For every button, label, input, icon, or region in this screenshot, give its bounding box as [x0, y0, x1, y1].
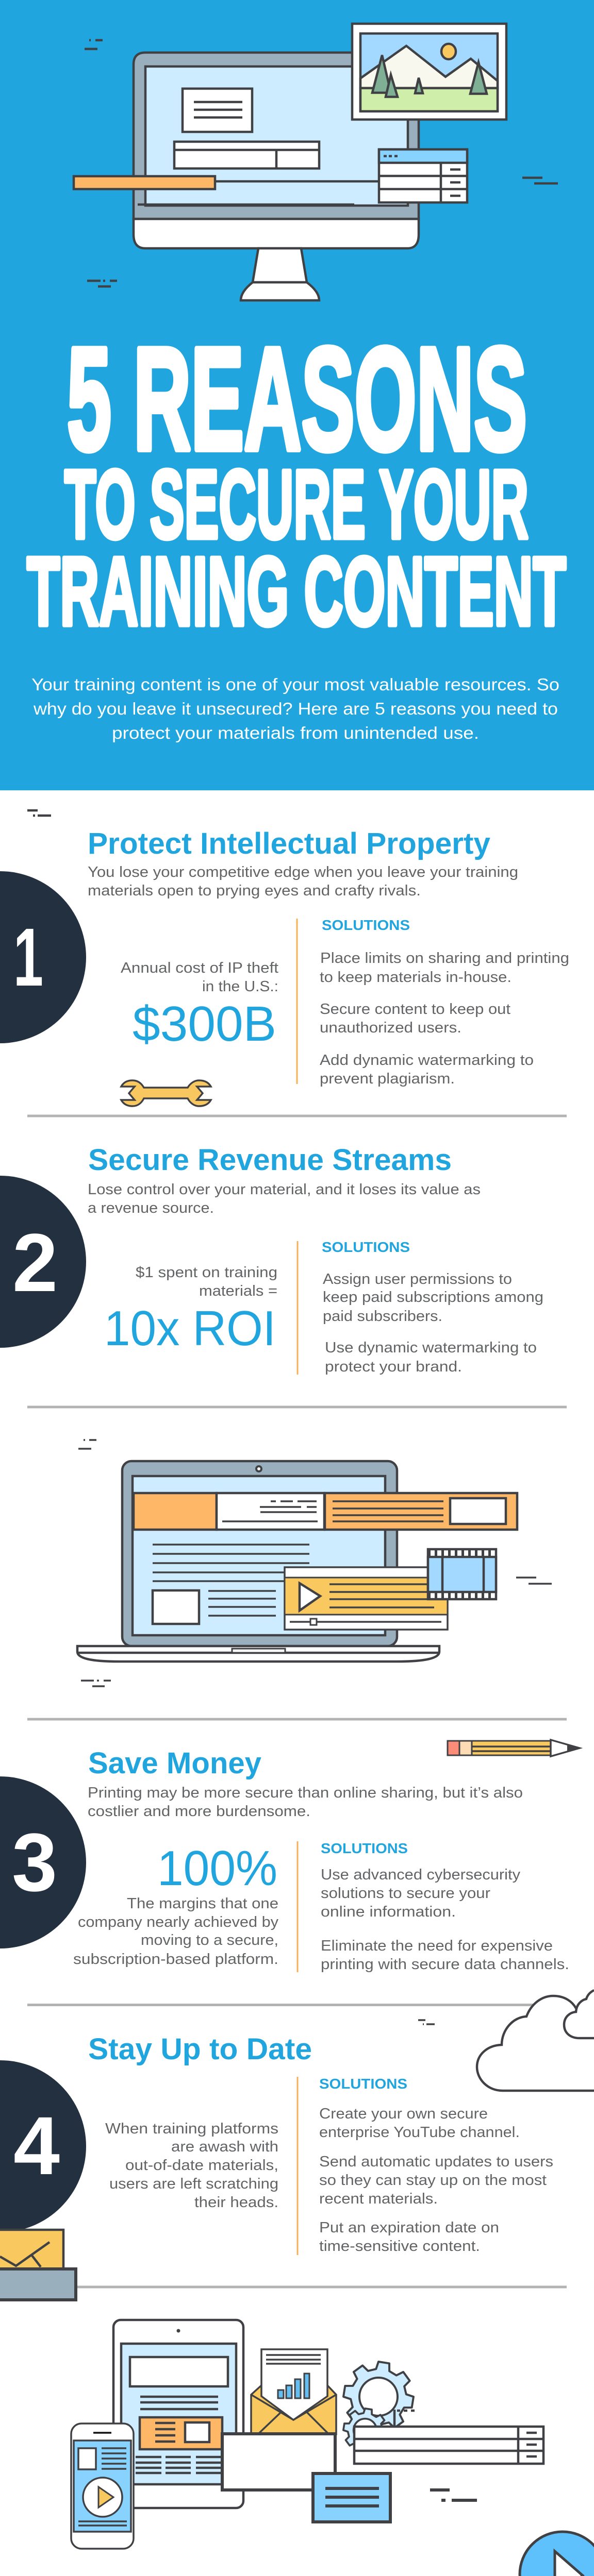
stat: 10x ROI: 10x ROI	[104, 1301, 276, 1356]
intro text: why do you leave it unsecured? Here are 5 reasons you need to	[33, 699, 558, 718]
description: out-of-date materials,	[125, 2157, 278, 2174]
icon: wrench	[121, 1080, 211, 1106]
intro text	[31, 675, 559, 742]
solutions	[319, 2076, 553, 2255]
solutions	[321, 1840, 569, 1973]
solutions: enterprise YouTube channel.	[319, 2124, 520, 2141]
title	[27, 317, 566, 646]
stat: 100%: subscription-based platform.	[73, 1951, 278, 1968]
description: are awash with	[171, 2139, 278, 2155]
illustration: desktop monitor	[74, 24, 558, 300]
illustration: laptop	[77, 1440, 552, 1686]
solutions: recent materials.	[319, 2191, 438, 2207]
solutions: solutions to secure your	[321, 1885, 490, 1902]
tablet	[113, 2320, 243, 2508]
solutions: to keep materials in-house.	[320, 969, 512, 986]
solutions: Create your own secure	[319, 2106, 488, 2122]
panel: header	[0, 0, 594, 790]
solutions: paid subscribers.	[323, 1308, 442, 1325]
description: Printing may be more secure than online sharing, but it’s also	[88, 1785, 523, 1801]
solutions: protect your brand.	[325, 1359, 462, 1375]
description: costlier and more burdensome.	[88, 1803, 310, 1820]
icon: play button	[520, 2532, 594, 2576]
stat: $300B: $300B	[133, 996, 276, 1052]
number badge 3	[0, 1776, 86, 1948]
solutions: Place limits on sharing and printing	[320, 950, 569, 967]
description: When training platforms	[105, 2121, 278, 2137]
solutions: Add dynamic watermarking to	[320, 1052, 534, 1069]
solutions	[322, 1239, 543, 1375]
solutions: so they can stay up on the most	[319, 2172, 547, 2189]
heading: save money: Save Money	[88, 1747, 261, 1780]
intro text: Your training content is one of your most valuable resources. So	[31, 675, 559, 694]
stat: $300B: in the U.S.:	[202, 978, 278, 995]
icon: pencil	[448, 1740, 580, 1756]
solutions: SOLUTIONS	[322, 917, 410, 933]
stat: 100%	[73, 1841, 279, 1968]
phone	[71, 2424, 134, 2549]
number badge 2	[0, 1176, 86, 1348]
number badge 3: 3	[12, 1816, 57, 1908]
solutions: Assign user permissions to	[323, 1271, 512, 1287]
solutions: SOLUTIONS	[322, 1239, 410, 1255]
number badge 4	[0, 2060, 86, 2232]
heading: secure revenue streams: Secure Revenue Streams	[88, 1143, 452, 1177]
solutions: Send automatic updates to users	[319, 2154, 553, 2170]
illustration: devices	[71, 2320, 543, 2549]
panel: reason 2	[0, 1143, 543, 1375]
description	[105, 2121, 278, 2211]
solutions: Use advanced cybersecurity	[321, 1867, 521, 1883]
stat: 10x ROI	[104, 1264, 277, 1356]
solutions	[320, 917, 569, 1087]
number badge 1: 1	[13, 911, 43, 1003]
description: Lose control over your material, and it loses its value as	[88, 1181, 481, 1198]
number badge 4: 4	[13, 2099, 60, 2192]
description: materials open to prying eyes and crafty rivals.	[88, 883, 421, 899]
solutions: unauthorized users.	[320, 1020, 461, 1036]
solutions: Secure content to keep out	[320, 1001, 510, 1018]
description: You lose your competitive edge when you leave your training	[88, 864, 518, 880]
gears	[343, 2362, 415, 2452]
description: their heads.	[194, 2194, 278, 2211]
description	[88, 1181, 481, 1216]
stat: 100%: company nearly achieved by	[78, 1914, 279, 1930]
solutions: online information.	[321, 1904, 456, 1920]
stat: 10x ROI: materials =	[199, 1283, 277, 1299]
heading: protect intellectual property: Protect Intellectual Property	[88, 827, 490, 860]
solutions: SOLUTIONS	[321, 1840, 408, 1856]
description: users are left scratching	[109, 2176, 278, 2192]
stat: 10x ROI: $1 spent on training	[136, 1264, 277, 1281]
icon: envelope on box	[0, 2230, 76, 2300]
solutions: keep paid subscriptions among	[323, 1289, 543, 1306]
description	[88, 1785, 523, 1820]
list window	[354, 2427, 543, 2464]
panel: reason 1	[0, 810, 569, 1106]
description: a revenue source.	[88, 1200, 214, 1216]
solutions: SOLUTIONS	[319, 2076, 407, 2092]
panel: reason 3	[0, 1740, 580, 1973]
solutions: Use dynamic watermarking to	[325, 1340, 537, 1356]
stat: 100%: 100%	[157, 1841, 277, 1896]
description	[88, 864, 518, 899]
intro text: protect your materials from unintended use.	[112, 723, 479, 742]
stat: 100%: moving to a secure,	[141, 1932, 278, 1948]
icon: clouds	[418, 1990, 594, 2091]
solutions: printing with secure data channels.	[321, 1956, 569, 1973]
solutions: Put an expiration date on	[319, 2219, 499, 2236]
stat: $300B	[121, 960, 278, 1052]
envelope with report	[251, 2349, 336, 2434]
panel: reason 4	[0, 1990, 594, 2300]
solutions: prevent plagiarism.	[320, 1071, 455, 1087]
solutions: time-sensitive content.	[319, 2238, 480, 2255]
heading: stay up to date: Stay Up to Date	[88, 2032, 312, 2066]
stat: 100%: The margins that one	[127, 1895, 278, 1912]
stat: $300B: Annual cost of IP theft	[121, 960, 278, 976]
number badge 2: 2	[12, 1216, 58, 1309]
number badge 1	[0, 871, 86, 1043]
solutions: Eliminate the need for expensive	[321, 1938, 553, 1954]
